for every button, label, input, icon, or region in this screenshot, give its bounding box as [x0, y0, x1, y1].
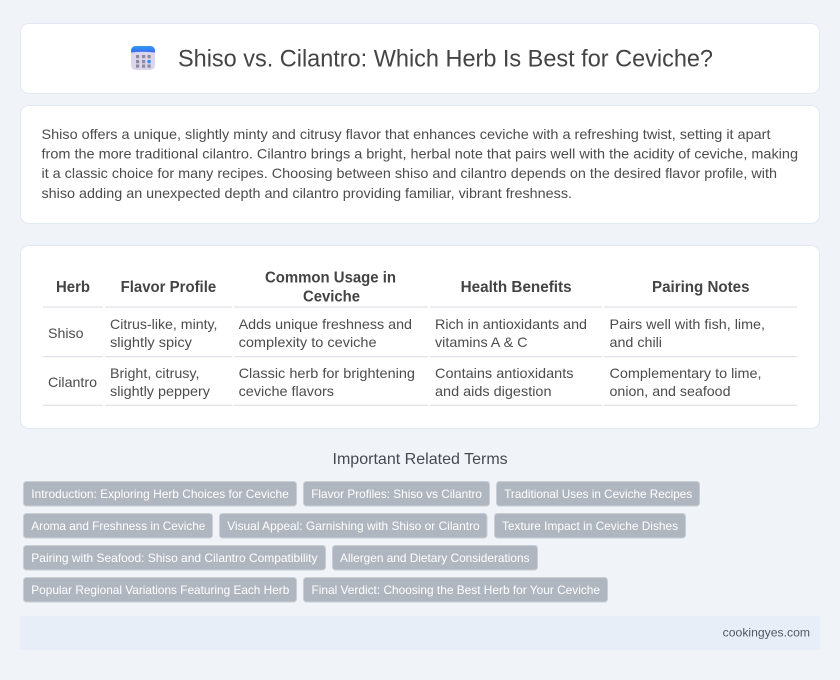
table header row: Common Usage in	[265, 270, 396, 287]
tag: Final Verdict: Choosing the Best Herb for Your Ceviche	[312, 583, 600, 597]
tag: Pairing with Seafood: Shiso and Cilantro Compatibility	[31, 551, 318, 565]
icon: calendar	[131, 46, 155, 70]
table row: shiso: complexity to ceviche	[239, 334, 377, 350]
table row: cilantro: ceviche flavors	[239, 383, 334, 399]
tag	[24, 482, 296, 506]
tag: Introduction: Exploring Herb Choices for Ceviche	[31, 487, 289, 501]
table header row: Ceviche	[303, 289, 360, 306]
text block: introduction	[42, 126, 798, 201]
table header row: Pairing Notes	[652, 279, 750, 296]
table row: shiso: Shiso	[48, 325, 84, 341]
tag	[496, 482, 700, 506]
table header row	[56, 270, 750, 306]
tag	[24, 514, 212, 538]
table header row: Flavor Profile	[121, 279, 216, 296]
text block: introduction: Shiso offers a unique, slightly minty and citrusy flavor that enhances ceviche with a refreshing twist, setting it apart	[42, 126, 771, 142]
tag	[332, 546, 538, 570]
panel: introduction paragraph	[20, 106, 820, 224]
tag: Flavor Profiles: Shiso vs Cilantro	[311, 487, 482, 501]
table row: cilantro: onion, and seafood	[610, 383, 730, 399]
title: Shiso vs. Cilantro: Which Herb Is Best for Ceviche?	[178, 46, 713, 72]
table header row: Herb	[56, 279, 90, 296]
footer	[20, 616, 820, 650]
text block: introduction: it a classic choice for many recipes. Choosing between shiso and cilantro depends on the desired flavor profile, with	[42, 165, 777, 181]
table row: cilantro: Classic herb for brightening	[239, 365, 415, 381]
table row: shiso	[48, 316, 765, 350]
table row: shiso: Pairs well with fish, lime,	[610, 316, 765, 332]
tag	[220, 514, 487, 538]
table row: cilantro: slightly peppery	[110, 383, 210, 399]
table row: shiso: Rich in antioxidants and	[435, 316, 587, 332]
heading: important related terms: Important Related Terms	[332, 451, 508, 468]
tag	[304, 578, 608, 602]
table row: cilantro: and aids digestion	[435, 383, 552, 399]
tag	[494, 514, 686, 538]
text block: introduction: from the more traditional cilantro. Cilantro brings a bright, herbal note that pairs well with the acidity of ceviche, making	[42, 146, 798, 162]
tag	[24, 578, 296, 602]
table row: shiso: and chili	[610, 334, 662, 350]
table header row: Health Benefits	[461, 279, 572, 296]
tag	[24, 546, 326, 570]
tag: Aroma and Freshness in Ceviche	[31, 519, 206, 533]
table row: cilantro: Complementary to lime,	[610, 365, 762, 381]
tag: Allergen and Dietary Considerations	[340, 551, 530, 565]
tag: Visual Appeal: Garnishing with Shiso or Cilantro	[227, 519, 480, 533]
table row: cilantro	[48, 365, 762, 399]
panel: comparison table	[20, 246, 820, 428]
footer source: cookingyes.com	[723, 626, 810, 640]
table row: shiso: slightly spicy	[110, 334, 192, 350]
table row: cilantro: Bright, citrusy,	[110, 365, 200, 381]
table row: shiso: Adds unique freshness and	[239, 316, 412, 332]
tag	[304, 482, 490, 506]
table row: shiso: vitamins A & C	[435, 334, 528, 350]
tag: Texture Impact in Ceviche Dishes	[502, 519, 678, 533]
table row: cilantro: Cilantro	[48, 374, 97, 390]
tag list: related terms	[24, 482, 700, 602]
table row: cilantro: Contains antioxidants	[435, 365, 574, 381]
text block: introduction: shiso adding an unexpected depth and cilantro providing familiar, vibrant freshness.	[42, 185, 572, 201]
panel: title header	[20, 24, 820, 94]
tag: Traditional Uses in Ceviche Recipes	[504, 487, 692, 501]
tag: Popular Regional Variations Featuring Each Herb	[31, 583, 290, 597]
table row: shiso: Citrus-like, minty,	[110, 316, 218, 332]
